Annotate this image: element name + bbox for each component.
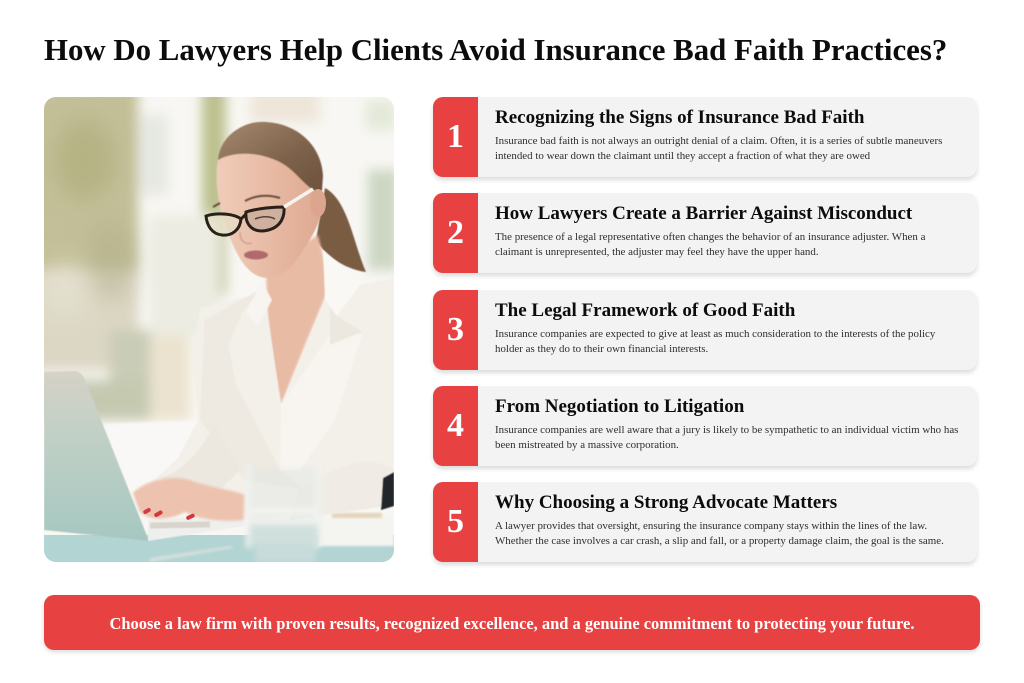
body text 5 — [495, 520, 944, 547]
heading 5: Why Choosing a Strong Advocate Matters — [495, 492, 837, 513]
title: How Do Lawyers Help Clients Avoid Insurance Bad Faith Practices? — [44, 33, 947, 67]
face — [217, 148, 323, 278]
body text 1: intended to wear down the claimant until they accept a fraction of what they are owed — [495, 150, 870, 162]
glasses — [206, 214, 241, 235]
number 4: 4 — [447, 407, 464, 444]
laptop screen — [44, 371, 149, 541]
body text 1 — [495, 135, 942, 162]
body text 4 — [495, 424, 958, 451]
lips — [244, 250, 268, 260]
body text 5: Whether the case involves a car crash, a slip and fall, or a property damage claim, the goal is the same. — [495, 535, 944, 547]
body text 2: The presence of a legal representative often changes the behavior of an insurance adjuster. When a — [495, 231, 925, 243]
number 4 — [433, 386, 478, 466]
panel: step 1 — [433, 97, 977, 177]
body text 1: Insurance bad faith is not always an outright denial of a claim. Often, it is a series of subtle maneuvers — [495, 135, 942, 147]
heading 2: How Lawyers Create a Barrier Against Misconduct — [495, 203, 912, 224]
body text 5: A lawyer provides that oversight, ensuring the insurance company stays within the lines of the law. — [495, 520, 927, 532]
body text 4: Insurance companies are well aware that a jury is likely to be sympathetic to an individual victim who has — [495, 424, 958, 436]
number 5: 5 — [447, 503, 464, 540]
body text 3: holder as they do to their own financial interests. — [495, 343, 708, 355]
table surface — [44, 535, 394, 562]
ear — [310, 189, 326, 217]
photo: woman in glasses working on a laptop — [44, 97, 394, 562]
neck and chest — [266, 235, 330, 405]
laptop base — [148, 516, 245, 541]
body text 4: been mistreated by a massive corporation. — [495, 439, 679, 451]
panel: step 2 — [433, 193, 977, 273]
number 2 — [433, 193, 478, 273]
heading 3: The Legal Framework of Good Faith — [495, 300, 795, 321]
panel: step 3 — [433, 290, 977, 370]
callout banner: Choose a law firm with proven results, recognized excellence, and a genuine commitment to protecting your future. — [110, 614, 914, 633]
nose shadow — [240, 232, 252, 243]
background — [44, 97, 394, 562]
heading 4: From Negotiation to Litigation — [495, 396, 744, 417]
laptop reflection — [150, 546, 234, 562]
body text 3 — [495, 328, 936, 355]
body text 2 — [495, 231, 926, 258]
number 3 — [433, 290, 478, 370]
number 1 — [433, 97, 478, 177]
callout banner — [44, 595, 980, 650]
panel: step 4 — [433, 386, 977, 466]
jacket — [152, 250, 394, 520]
body text 3: Insurance companies are expected to give at least as much consideration to the interests of the policy — [495, 328, 935, 340]
paper and desk — [318, 514, 394, 546]
body text 2: claimant is unrepresented, the adjuster may feel they have the upper hand. — [495, 246, 819, 258]
head — [206, 122, 326, 278]
glass of water — [246, 463, 321, 562]
eyebrows — [245, 196, 280, 201]
ponytail — [316, 188, 366, 272]
white table — [100, 420, 215, 490]
panel: step 5 — [433, 482, 977, 562]
heading 1: Recognizing the Signs of Insurance Bad Faith — [495, 107, 864, 128]
number 2: 2 — [447, 214, 464, 251]
number 3: 3 — [447, 311, 464, 348]
hair — [218, 122, 323, 191]
number 5 — [433, 482, 478, 562]
hands — [133, 478, 245, 521]
number 1: 1 — [447, 118, 464, 155]
